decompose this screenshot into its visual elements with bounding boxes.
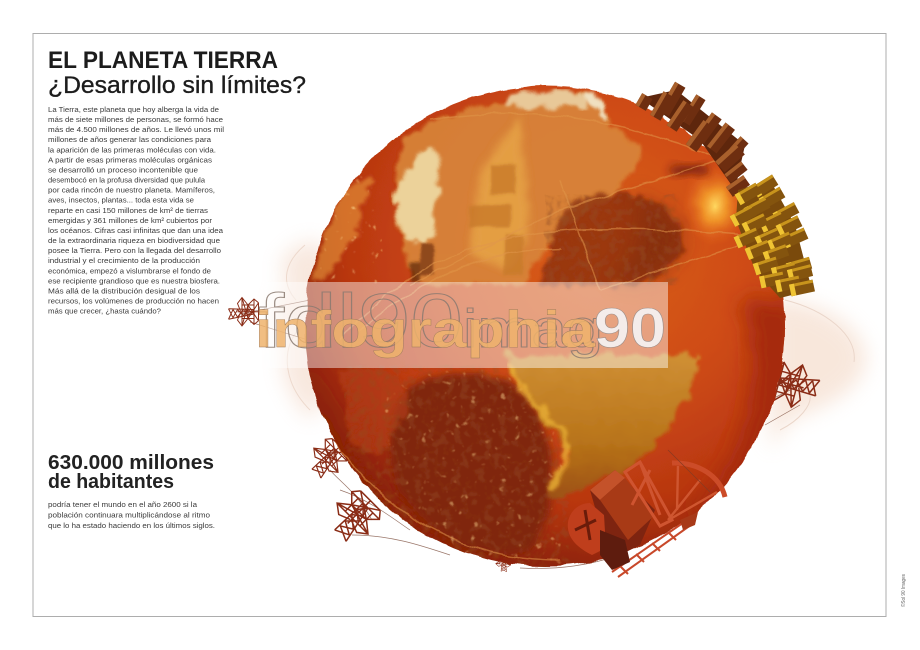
continent: golden southern land (508, 355, 700, 500)
watermark outlined text: imag (463, 299, 603, 359)
intro text block: industrial y el crecimiento de la producción (48, 256, 200, 265)
illustration: gold blocks right (730, 175, 815, 298)
watermark veil (265, 282, 668, 368)
illustration: pump jack (568, 450, 725, 577)
watermark outlined text: fdl90 (258, 279, 463, 364)
intro text block: más de siete millones de personas, se formó hace (48, 115, 223, 124)
illustration: cables and pylons (228, 298, 823, 572)
intro text block: se desarrolló un proceso incontenible que (48, 166, 198, 174)
intro text block: millones de años generar las condiciones para (48, 135, 212, 144)
continent: arctic pale patch (505, 91, 590, 110)
statistic text: población continuara multiplicándose al ritmo (48, 510, 210, 520)
intro text block: más que crecer, ¿hasta cuándo? (48, 307, 161, 316)
left coast texture (312, 172, 372, 282)
statistic heading: 630.000 millones (48, 452, 214, 474)
intro text block: La Tierra, este planeta que hoy alberga la vida de (48, 105, 219, 114)
continent: lower left dark mottled (390, 374, 552, 554)
shading: dark lower left (308, 369, 508, 560)
watermark orange text: infographia (255, 301, 596, 359)
pump main box (590, 470, 655, 560)
intro text block: por cada rincón de nuestro planeta. Mamíferos, (48, 186, 215, 195)
intro text block: A partir de esas primeras moléculas orgánicas (48, 155, 212, 164)
intro text block: emergidas y 361 millones de km² cubiertos por (48, 216, 212, 225)
pump cube (568, 503, 606, 555)
icon: pylon lower left one (302, 434, 352, 484)
coast highlight (512, 368, 567, 490)
illustration: city blocks top right (635, 82, 750, 197)
statistic text: que lo ha estado haciendo en los últimos siglos. (48, 521, 215, 530)
continent: pale coast (396, 148, 439, 244)
texture: speckle on dark land east (545, 195, 680, 285)
pump wheel (672, 463, 725, 497)
highlight: yellow sun glow (687, 166, 738, 240)
texture: light speckle (385, 370, 565, 565)
band: left mid land (340, 366, 410, 454)
illustration: smoke right (770, 300, 866, 450)
illustration: smoke left (274, 240, 340, 420)
intro text block: Más allá de la distribución desigual de los (48, 286, 200, 295)
watermark (255, 279, 668, 368)
intro text block: más de 4.500 millones de años. Le llevó unos mil (48, 125, 224, 134)
title: ¿Desarrollo sin límites? (48, 72, 306, 99)
title (48, 47, 306, 99)
dark land mid right (610, 190, 682, 282)
intro text block: reparte en casi 150 millones de km² de tierras (48, 206, 208, 215)
statistic text (48, 500, 215, 530)
icon: pylon bottom (495, 555, 512, 572)
intro text block: desembocó en la profusa diversidad que pulula (48, 176, 206, 185)
continent: northern land (396, 92, 640, 285)
city backing (640, 90, 745, 190)
watermark white number: 90 (594, 296, 666, 359)
intro text block: los océanos. Cifras casi infinitas que dan una idea (48, 226, 224, 235)
intro text block: la aparición de las primeras moléculas con vida. (48, 145, 216, 154)
texture: dark speckle (345, 365, 570, 570)
intro text block: de la extraordinaria riqueza en biodiversidad que (48, 236, 220, 245)
statistic heading (48, 452, 214, 493)
statistic text: podría tener el mundo en el año 2600 si la (48, 500, 198, 509)
continent: central block glow (470, 115, 530, 270)
land blocks (410, 165, 523, 282)
icon: pylon lower left two (322, 485, 386, 549)
intro text block: ese recipiente grandioso que es nuestra biosfera. (48, 276, 220, 285)
thin meridian lines (320, 114, 745, 560)
title: EL PLANETA TIERRA (48, 47, 278, 74)
dark spot (668, 164, 708, 176)
icon: pylon left (228, 298, 258, 326)
intro text block: recursos, los volúmenes de producción no hacen (48, 296, 219, 306)
illustration: globe (300, 86, 800, 590)
icon: pylon right (767, 358, 823, 413)
intro text block (48, 105, 224, 316)
watermark outlined text (258, 279, 603, 364)
texture: light flecks on left coast (312, 175, 382, 285)
intro text block: económica, empezó a vislumbrarse el fondo de (48, 266, 211, 275)
gold backing (736, 180, 812, 298)
pump lattice base (612, 518, 695, 577)
pump frame (625, 462, 672, 526)
dark land east (540, 193, 682, 285)
intro text block: posee la Tierra. Pero con la llegada del desarrollo (48, 246, 221, 255)
credit: ©Sol 90 Images (900, 574, 907, 607)
statistic heading: de habitantes (48, 471, 174, 493)
intro text block: aves, insectos, plantas... toda esta vida se (48, 196, 194, 205)
shading: dark limb lower right (697, 289, 786, 512)
globe base (305, 86, 785, 566)
